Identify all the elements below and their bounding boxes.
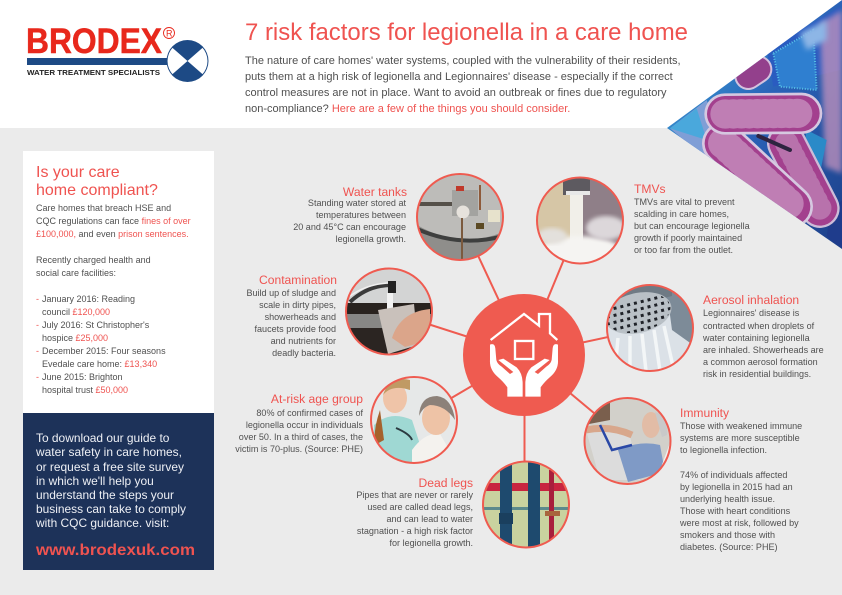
sidebar fines list: December 2015: Four seasons <box>42 346 166 356</box>
body: to legionella infection. <box>680 445 767 455</box>
sidebar fines list: July 2016: St Christopher's <box>42 320 150 330</box>
call to action text: with CQC guidance. visit: <box>35 516 169 530</box>
heading: At-risk age group <box>271 392 363 406</box>
sidebar fines list: Evedale care home: £13,340 <box>42 359 157 369</box>
body: scale in dirty pipes, <box>259 300 336 310</box>
website link: www.brodexuk.com <box>35 542 195 559</box>
intro text: puts them at a high risk of legionella and Legionnaires' disease - especially if the correct <box>245 71 673 83</box>
logo valve bar <box>27 58 169 65</box>
body: over 50. In a third of cases, the <box>239 432 363 442</box>
capsule: top <box>704 92 822 135</box>
sidebar fines list: council £120,000 <box>42 307 110 317</box>
body: victim is 70-plus. (Source: PHE) <box>235 444 363 454</box>
title: 7 risk factors for legionella in a care home <box>245 19 688 46</box>
body: a common aerosol formation <box>703 357 818 367</box>
sidebar heading: Is your care <box>36 164 120 181</box>
body: deadly bacteria. <box>272 348 336 358</box>
label: at-risk age group <box>235 392 363 454</box>
call to action text: in which we'll help you <box>36 474 154 488</box>
body: stagnation - a high risk factor <box>357 526 473 536</box>
body: Legionnaires' disease is <box>703 308 800 318</box>
body: are inhaled. Showerheads are <box>703 345 824 355</box>
body: smokers and those with <box>680 530 775 540</box>
body: Those with heart conditions <box>680 506 791 516</box>
body: by legionella in 2015 had an <box>680 482 793 492</box>
sidebar fines list: June 2015: Brighton <box>42 372 123 382</box>
call to action text: water safety in care homes, <box>35 445 182 459</box>
body: legionella occur in individuals <box>246 420 363 430</box>
body: growth if poorly maintained <box>634 233 742 243</box>
call to action text: understand the steps your <box>36 488 174 502</box>
call to action text: To download our guide to <box>36 431 170 445</box>
body: contracted when droplets of <box>703 321 815 331</box>
logo valve disc <box>166 40 208 82</box>
label: water tanks <box>293 185 407 244</box>
intro text: control measures are not in place. Want to avoid an outbreak or fines due to regulatory <box>245 87 667 99</box>
body: temperatures between <box>316 210 406 220</box>
label: aerosol inhalation <box>702 293 824 379</box>
body: systems are more susceptible <box>680 433 800 443</box>
body: scalding in care homes, <box>634 209 729 219</box>
panel: compliance sidebar <box>23 151 214 413</box>
body: TMVs are vital to prevent <box>634 197 735 207</box>
body: showerheads and <box>265 312 336 322</box>
heading: TMVs <box>634 182 666 196</box>
body: and can lead to water <box>386 514 473 524</box>
sidebar fines list: hospital trust £50,000 <box>42 385 128 395</box>
sidebar intro: Recently charged health and <box>36 255 151 265</box>
capsule: front lower <box>723 143 792 207</box>
logo wordmark: BRODEX <box>26 22 163 61</box>
logo <box>27 27 208 82</box>
sidebar fines list: - <box>36 320 39 330</box>
photo: aerosol shower head <box>600 285 693 371</box>
registered mark <box>164 28 174 38</box>
body: 20 and 45°C can encourage <box>293 222 406 232</box>
body: diabetes. (Source: PHE) <box>680 542 778 552</box>
capsule: back right <box>787 143 820 208</box>
body: but can encourage legionella <box>634 221 751 231</box>
body: Pipes that are never or rarely <box>356 490 473 500</box>
intro text: non-compliance? Here are a few of the things you should consider. <box>245 103 570 115</box>
label: immunity <box>679 406 802 552</box>
photo: dead leg pipes <box>483 461 570 548</box>
label: TMVs <box>634 182 751 255</box>
sidebar fines list: - <box>36 346 39 356</box>
label: contamination <box>246 273 337 358</box>
panel: download call to action <box>23 413 214 570</box>
body: risk in residential buildings. <box>703 369 811 379</box>
call to action text: or request a free site survey <box>36 460 184 474</box>
sidebar intro: social care facilities: <box>36 268 116 278</box>
heading: Immunity <box>680 406 730 420</box>
body: underlying health issue. <box>680 494 775 504</box>
body: 80% of confirmed cases of <box>256 408 363 418</box>
body: for legionella growth. <box>390 538 473 548</box>
body: legionella growth. <box>336 234 406 244</box>
logo tagline: WATER TREATMENT SPECIALISTS <box>27 68 160 77</box>
sidebar fines list: - <box>36 294 39 304</box>
sidebar intro: £100,000, and even prison sentences. <box>36 229 189 239</box>
sidebar fines list: - <box>36 372 39 382</box>
heading: Aerosol inhalation <box>703 293 799 307</box>
body: or too far from the outlet. <box>634 245 733 255</box>
connector lines <box>389 217 650 470</box>
photo: nurse and elderly woman <box>371 377 457 463</box>
body: used are called dead legs, <box>367 502 473 512</box>
sidebar intro: CQC regulations can face fines of over <box>36 216 191 226</box>
body: were most at risk, followed by <box>679 518 799 528</box>
legionella bacteria image <box>660 0 842 250</box>
body: Build up of sludge and <box>246 288 336 298</box>
heading: Contamination <box>259 273 337 287</box>
photo: TMV tap <box>537 177 626 268</box>
photo: water tank <box>417 174 503 260</box>
capsule: upper <box>748 69 758 76</box>
body: water containing legionella <box>702 333 811 343</box>
body: 74% of individuals affected <box>680 470 787 480</box>
photo: immunity patient <box>584 398 671 484</box>
central hub icon <box>463 294 585 416</box>
sidebar heading: home compliant? <box>36 182 158 199</box>
heading: Dead legs <box>419 476 473 490</box>
heading: Water tanks <box>343 185 407 199</box>
registered mark: R <box>166 28 173 38</box>
sidebar fines list: hospice £25,000 <box>42 333 108 343</box>
call to action text: business can take to comply <box>36 502 186 516</box>
body: Those with weakened immune <box>680 421 802 431</box>
body: and nutrients for <box>271 336 336 346</box>
background panel <box>0 128 842 595</box>
intro text: The nature of care homes' water systems, coupled with the vulnerability of their residents, <box>245 55 681 67</box>
photo: contamination tap and glass <box>346 268 432 355</box>
sidebar fines list: January 2016: Reading <box>42 294 135 304</box>
sidebar intro: Care homes that breach HSE and <box>36 203 171 213</box>
label: dead legs <box>356 476 473 548</box>
body: faucets provide food <box>255 324 336 334</box>
body: Standing water stored at <box>308 198 406 208</box>
